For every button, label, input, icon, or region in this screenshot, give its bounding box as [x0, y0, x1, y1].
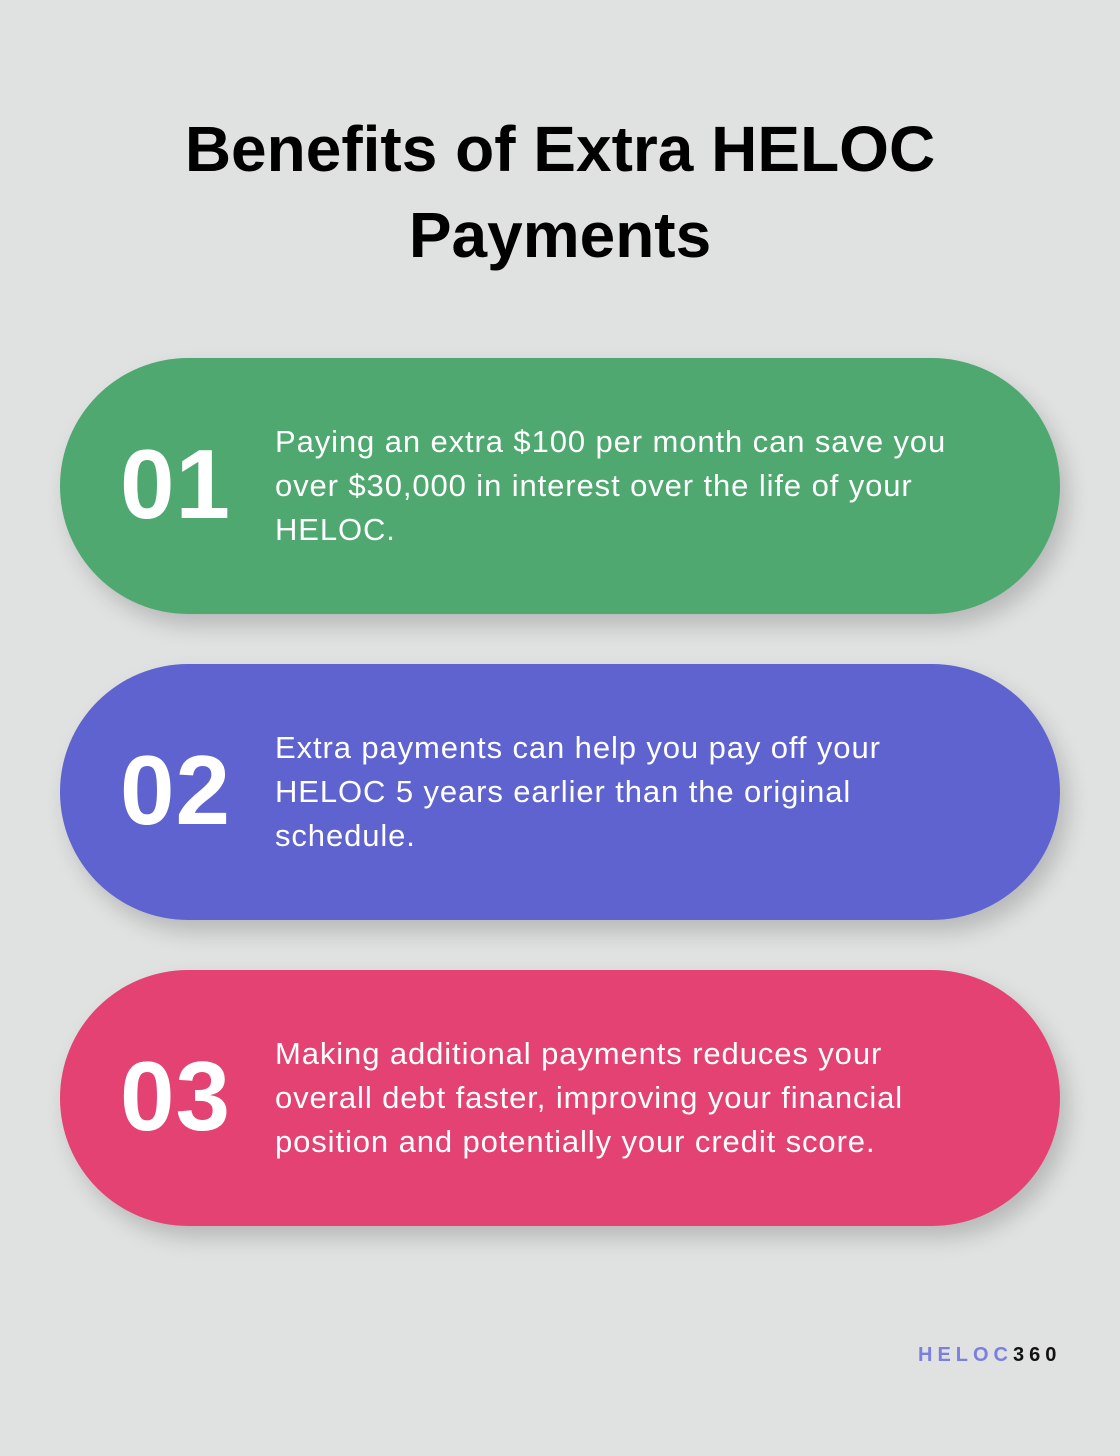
- number 02: 02: [120, 735, 231, 845]
- text 02: [275, 730, 881, 853]
- number 03: 03: [120, 1041, 231, 1151]
- logo: HELOC360: [918, 1344, 1061, 1366]
- panel: benefit 03: [60, 970, 1060, 1226]
- text 01: Paying an extra $100 per month can save you over $30,000 in interest over the life of your HELOC.: [275, 424, 946, 547]
- text 02: Extra payments can help you pay off your: [275, 730, 881, 765]
- text 03: Making additional payments reduces your overall debt faster, improving your financial position and potentially your credit score.: [275, 1036, 903, 1159]
- title: Payments: [409, 199, 711, 271]
- panel: benefit 02: [60, 664, 1060, 920]
- number 01: 01: [120, 429, 231, 539]
- title: Benefits of Extra HELOC: [185, 113, 935, 185]
- text 02: HELOC 5 years earlier than the original schedule.: [275, 774, 851, 853]
- panel: benefit 01: [60, 358, 1060, 614]
- title: [185, 113, 935, 271]
